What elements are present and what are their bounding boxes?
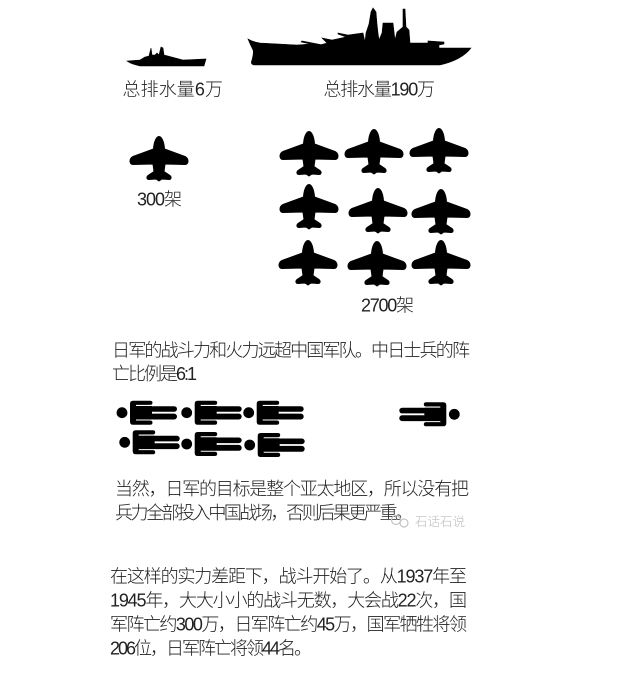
text block: Japanese strategic goal: 兵力全部投入中国战场，否则后果更严重。 — [115, 503, 413, 523]
text block: combat power comparison — [112, 340, 470, 384]
label: 2700 planes: 2700架 — [361, 296, 414, 316]
label: large fleet displacement: 总排水量190万 — [324, 80, 435, 100]
watermark: 石话石说 — [415, 515, 465, 529]
label: small fleet displacement: 总排水量6万 — [122, 80, 223, 100]
text block: war casualties: 1945年，大大小小的战斗无数，大会战22次，国 — [110, 590, 467, 610]
icon: single plane — [130, 136, 188, 181]
icon: small battleship — [127, 47, 206, 66]
text block: combat power comparison: 日军的战斗力和火力远超中国军队。中日士兵的阵 — [112, 340, 470, 360]
text block: Japanese strategic goal — [115, 479, 469, 523]
text block: war casualties: 在这样的实力差距下，战斗开始了。从1937年至 — [110, 566, 467, 586]
icon group: six fallen Chinese soldiers — [117, 401, 305, 457]
icon group: nine planes — [279, 128, 470, 286]
text block: combat power comparison: 亡比例是6:1 — [112, 364, 197, 384]
watermark — [392, 515, 465, 529]
text block: war casualties: 206位，日军阵亡将领44名。 — [110, 638, 312, 658]
label: 300 planes: 300架 — [137, 190, 182, 210]
text block: war casualties: 军阵亡约300万，日军阵亡约45万，国军牺牲将领 — [110, 614, 467, 634]
icon: large battleship — [248, 8, 471, 65]
icon: one fallen Japanese soldier — [399, 402, 460, 426]
text block: Japanese strategic goal: 当然，日军的目标是整个亚太地区，所以没有把 — [115, 479, 469, 499]
text block: war casualties — [110, 566, 467, 658]
